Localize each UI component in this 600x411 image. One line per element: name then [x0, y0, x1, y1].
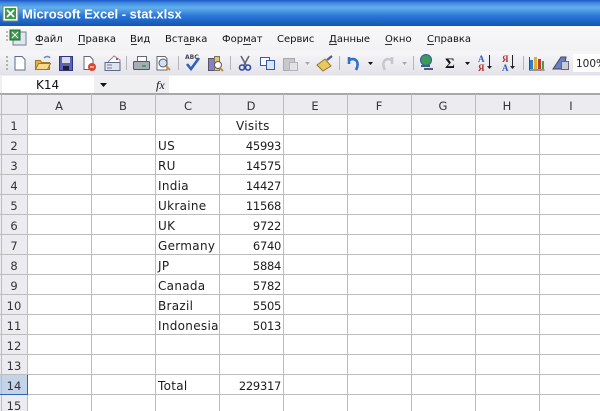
menu items: Окно	[385, 34, 412, 45]
row headers: 3	[10, 159, 18, 173]
row headers: 8	[10, 259, 18, 273]
menu items: Правка	[78, 34, 116, 45]
toolbar	[0, 51, 600, 75]
icon: research	[208, 56, 223, 71]
table data: 14427	[246, 179, 281, 193]
icon: chart	[530, 57, 544, 70]
table data: 45993	[246, 139, 281, 153]
table data: 14575	[246, 159, 281, 173]
formula bar	[0, 75, 600, 93]
icon: sort descending: Я	[502, 54, 509, 64]
icon: preview	[157, 56, 170, 70]
row headers: 13	[7, 359, 21, 373]
table data: 6740	[253, 239, 281, 253]
row headers: 1	[10, 119, 18, 133]
column headers: I	[569, 99, 573, 113]
icon: open	[36, 56, 50, 70]
column headers: G	[439, 99, 447, 113]
icon: sort ascending	[478, 54, 492, 73]
menu items: Сервис	[277, 34, 314, 45]
menu items	[35, 34, 471, 45]
column headers: E	[311, 99, 319, 113]
icon: format painter	[317, 56, 332, 71]
row headers: 11	[7, 319, 21, 333]
table data: Indonesia	[158, 319, 219, 333]
table data: Visits	[236, 119, 270, 133]
menu items: Вставка	[165, 34, 207, 45]
column headers: D	[247, 99, 256, 113]
selected row marker	[0, 375, 28, 394]
table data: Brazil	[158, 299, 193, 313]
icon: paste	[284, 58, 298, 70]
icon: copy	[260, 58, 274, 70]
table data: US	[158, 139, 175, 153]
zoom box	[573, 54, 600, 72]
table data: 5782	[253, 279, 281, 293]
icon: mail	[105, 56, 120, 70]
table data: Total	[157, 379, 188, 393]
icon: sort ascending: Я	[478, 63, 485, 73]
icon: sort descending: А	[502, 63, 509, 73]
menu items: Формат	[222, 34, 263, 45]
menu items: Данные	[329, 34, 370, 45]
title bar	[0, 0, 600, 26]
table data: 229317	[239, 379, 281, 393]
icon: excel logo	[3, 6, 18, 21]
icon: sort ascending: А	[478, 54, 485, 64]
row headers: 2	[10, 139, 18, 153]
icon: permission	[84, 56, 96, 71]
table data: 11568	[246, 199, 281, 213]
icon: save	[60, 56, 72, 70]
menu items: Справка	[427, 34, 471, 45]
column headers	[0, 94, 600, 114]
column headers: F	[376, 99, 382, 113]
name box arrow	[100, 83, 107, 87]
table data: 9722	[253, 219, 281, 233]
row headers: 6	[10, 219, 18, 233]
spreadsheet grid	[0, 94, 600, 411]
row headers: 9	[10, 279, 18, 293]
icon: hyperlink	[420, 54, 433, 69]
icon: drawing	[553, 57, 568, 70]
dropdown arrows	[305, 62, 470, 65]
table data: UK	[158, 219, 176, 233]
icon: new	[15, 56, 25, 70]
icon: sort descending	[502, 54, 515, 73]
column headers: H	[503, 99, 511, 113]
name box	[2, 76, 94, 93]
table data: Canada	[158, 279, 205, 293]
table data: India	[158, 179, 189, 193]
column headers: B	[119, 99, 127, 113]
column headers: C	[184, 99, 192, 113]
menu items: Вид	[130, 34, 150, 45]
row headers: 14	[7, 379, 21, 393]
row headers: 12	[7, 339, 21, 353]
icon: autosum: Σ	[445, 56, 455, 72]
icon: redo	[383, 57, 392, 70]
table data: Ukraine	[158, 199, 206, 213]
table data	[157, 119, 281, 393]
row headers: 10	[7, 299, 21, 313]
name box: K14	[36, 78, 59, 92]
icon: print	[134, 56, 150, 70]
table data: 5505	[253, 299, 281, 313]
title text: Microsoft Excel - stat.xlsx	[22, 6, 182, 22]
menu bar	[0, 26, 600, 51]
icon: spelling	[185, 54, 199, 69]
icon: spelling: ABC	[185, 54, 199, 61]
row headers: 7	[10, 239, 18, 253]
row headers: 5	[10, 199, 18, 213]
column headers: A	[55, 99, 63, 113]
table data: 5013	[253, 319, 281, 333]
icon: undo	[349, 57, 358, 70]
row headers	[0, 114, 27, 411]
table data: JP	[157, 259, 169, 273]
row headers: 4	[10, 179, 18, 193]
icon: workbook	[10, 30, 26, 45]
table data: Germany	[158, 239, 215, 253]
icon: cut	[240, 56, 250, 70]
fx icon: fx	[156, 78, 165, 92]
menu items: Файл	[35, 34, 63, 45]
table data: 5884	[253, 259, 281, 273]
formula input	[169, 76, 600, 93]
table data: RU	[158, 159, 176, 173]
